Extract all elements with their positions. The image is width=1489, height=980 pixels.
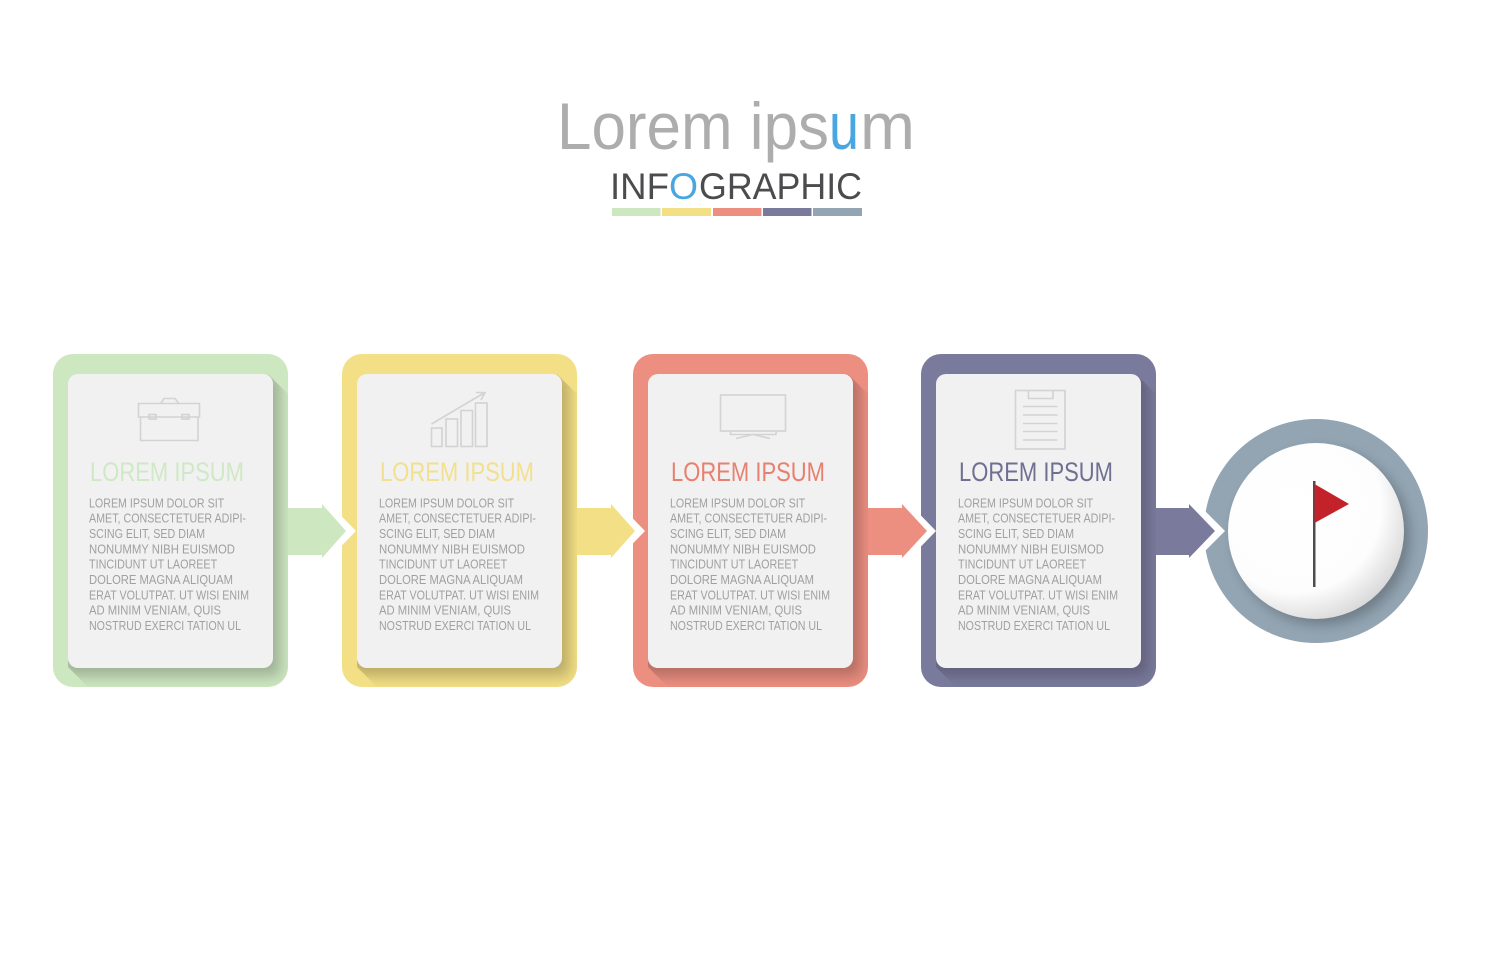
text block: step 4: DOLORE MAGNA ALIQUAM [958,573,1102,587]
heading: step 3: LOREM IPSUM [671,457,825,487]
arrow 1 [288,504,346,558]
text block: step 4: TINCIDUNT UT LAOREET [958,558,1087,572]
text block: step 3: DOLORE MAGNA ALIQUAM [670,573,814,587]
panel: step 3 [633,354,868,687]
text block: step 1: AMET, CONSECTETUER ADIPI- [89,512,246,526]
text block: step 1: NONUMMY NIBH EUISMOD [89,542,235,556]
arrow 2 notch [611,496,645,566]
heading: step 4: LOREM IPSUM [959,457,1113,487]
text block: step 3: AD MINIM VENIAM, QUIS [670,604,802,618]
arrow 3 notch [902,496,936,566]
text block: step 3: NOSTRUD EXERCI TATION UL [670,619,822,633]
subtitle: GRAPHIC [699,166,862,207]
text block: step 3: TINCIDUNT UT LAOREET [670,558,799,572]
text block: step 2: SCING ELIT, SED DIAM [379,527,495,541]
text block: step 1: ERAT VOLUTPAT. UT WISI ENIM [89,588,249,602]
text block: step 4: AMET, CONSECTETUER ADIPI- [958,512,1115,526]
heading: step 1: LOREM IPSUM [90,457,244,487]
text block: step 3: NONUMMY NIBH EUISMOD [670,542,816,556]
text block: step 2: NOSTRUD EXERCI TATION UL [379,619,531,633]
text block: step 1: SCING ELIT, SED DIAM [89,527,205,541]
arrow 1 notch [322,496,356,566]
text block: step 2: DOLORE MAGNA ALIQUAM [379,573,523,587]
text block: step 2: AD MINIM VENIAM, QUIS [379,604,511,618]
title: Lorem ips [557,89,829,163]
text block: step 2: NONUMMY NIBH EUISMOD [379,542,525,556]
text block: step 1: LOREM IPSUM DOLOR SIT [89,496,224,510]
text block: step 4: LOREM IPSUM DOLOR SIT [958,496,1093,510]
arrow 4 notch [1190,496,1225,566]
heading: step 2: LOREM IPSUM [380,457,534,487]
colour legend bar [612,208,862,216]
text block: step 1: DOLORE MAGNA ALIQUAM [89,573,233,587]
text block: step 2: TINCIDUNT UT LAOREET [379,558,508,572]
text block: step 3: ERAT VOLUTPAT. UT WISI ENIM [670,588,830,602]
title: m [860,89,915,163]
text block: step 4: AD MINIM VENIAM, QUIS [958,604,1090,618]
text block: step 2: LOREM IPSUM DOLOR SIT [379,496,514,510]
panel: step 2 [342,354,577,687]
icon: briefcase [138,398,200,440]
title: u [829,89,859,163]
panel: step 1 [53,354,288,687]
text block: step 3: AMET, CONSECTETUER ADIPI- [670,512,827,526]
subtitle: INF [610,166,669,207]
text block: step 2: AMET, CONSECTETUER ADIPI- [379,512,536,526]
text block: step 4: SCING ELIT, SED DIAM [958,527,1074,541]
text block: step 4: NOSTRUD EXERCI TATION UL [958,619,1110,633]
text block: step 1: AD MINIM VENIAM, QUIS [89,604,221,618]
subtitle: O [669,166,698,207]
panel: step 4 [921,354,1156,687]
icon: monitor [720,395,786,438]
text block: step 3: SCING ELIT, SED DIAM [670,527,786,541]
icon: clipboard [1016,390,1065,449]
text block: step 2: ERAT VOLUTPAT. UT WISI ENIM [379,588,539,602]
icon: flag [1313,481,1349,587]
text block: step 1: NOSTRUD EXERCI TATION UL [89,619,241,633]
arrow 4 [1156,504,1215,558]
icon: bar chart with arrow [432,392,487,446]
arrow 2 [577,504,635,558]
text block: step 4: NONUMMY NIBH EUISMOD [958,542,1104,556]
goal circle [1204,419,1428,643]
arrow 3 [868,504,927,558]
text block: step 1: TINCIDUNT UT LAOREET [89,558,218,572]
text block: step 4: ERAT VOLUTPAT. UT WISI ENIM [958,588,1118,602]
text block: step 3: LOREM IPSUM DOLOR SIT [670,496,805,510]
